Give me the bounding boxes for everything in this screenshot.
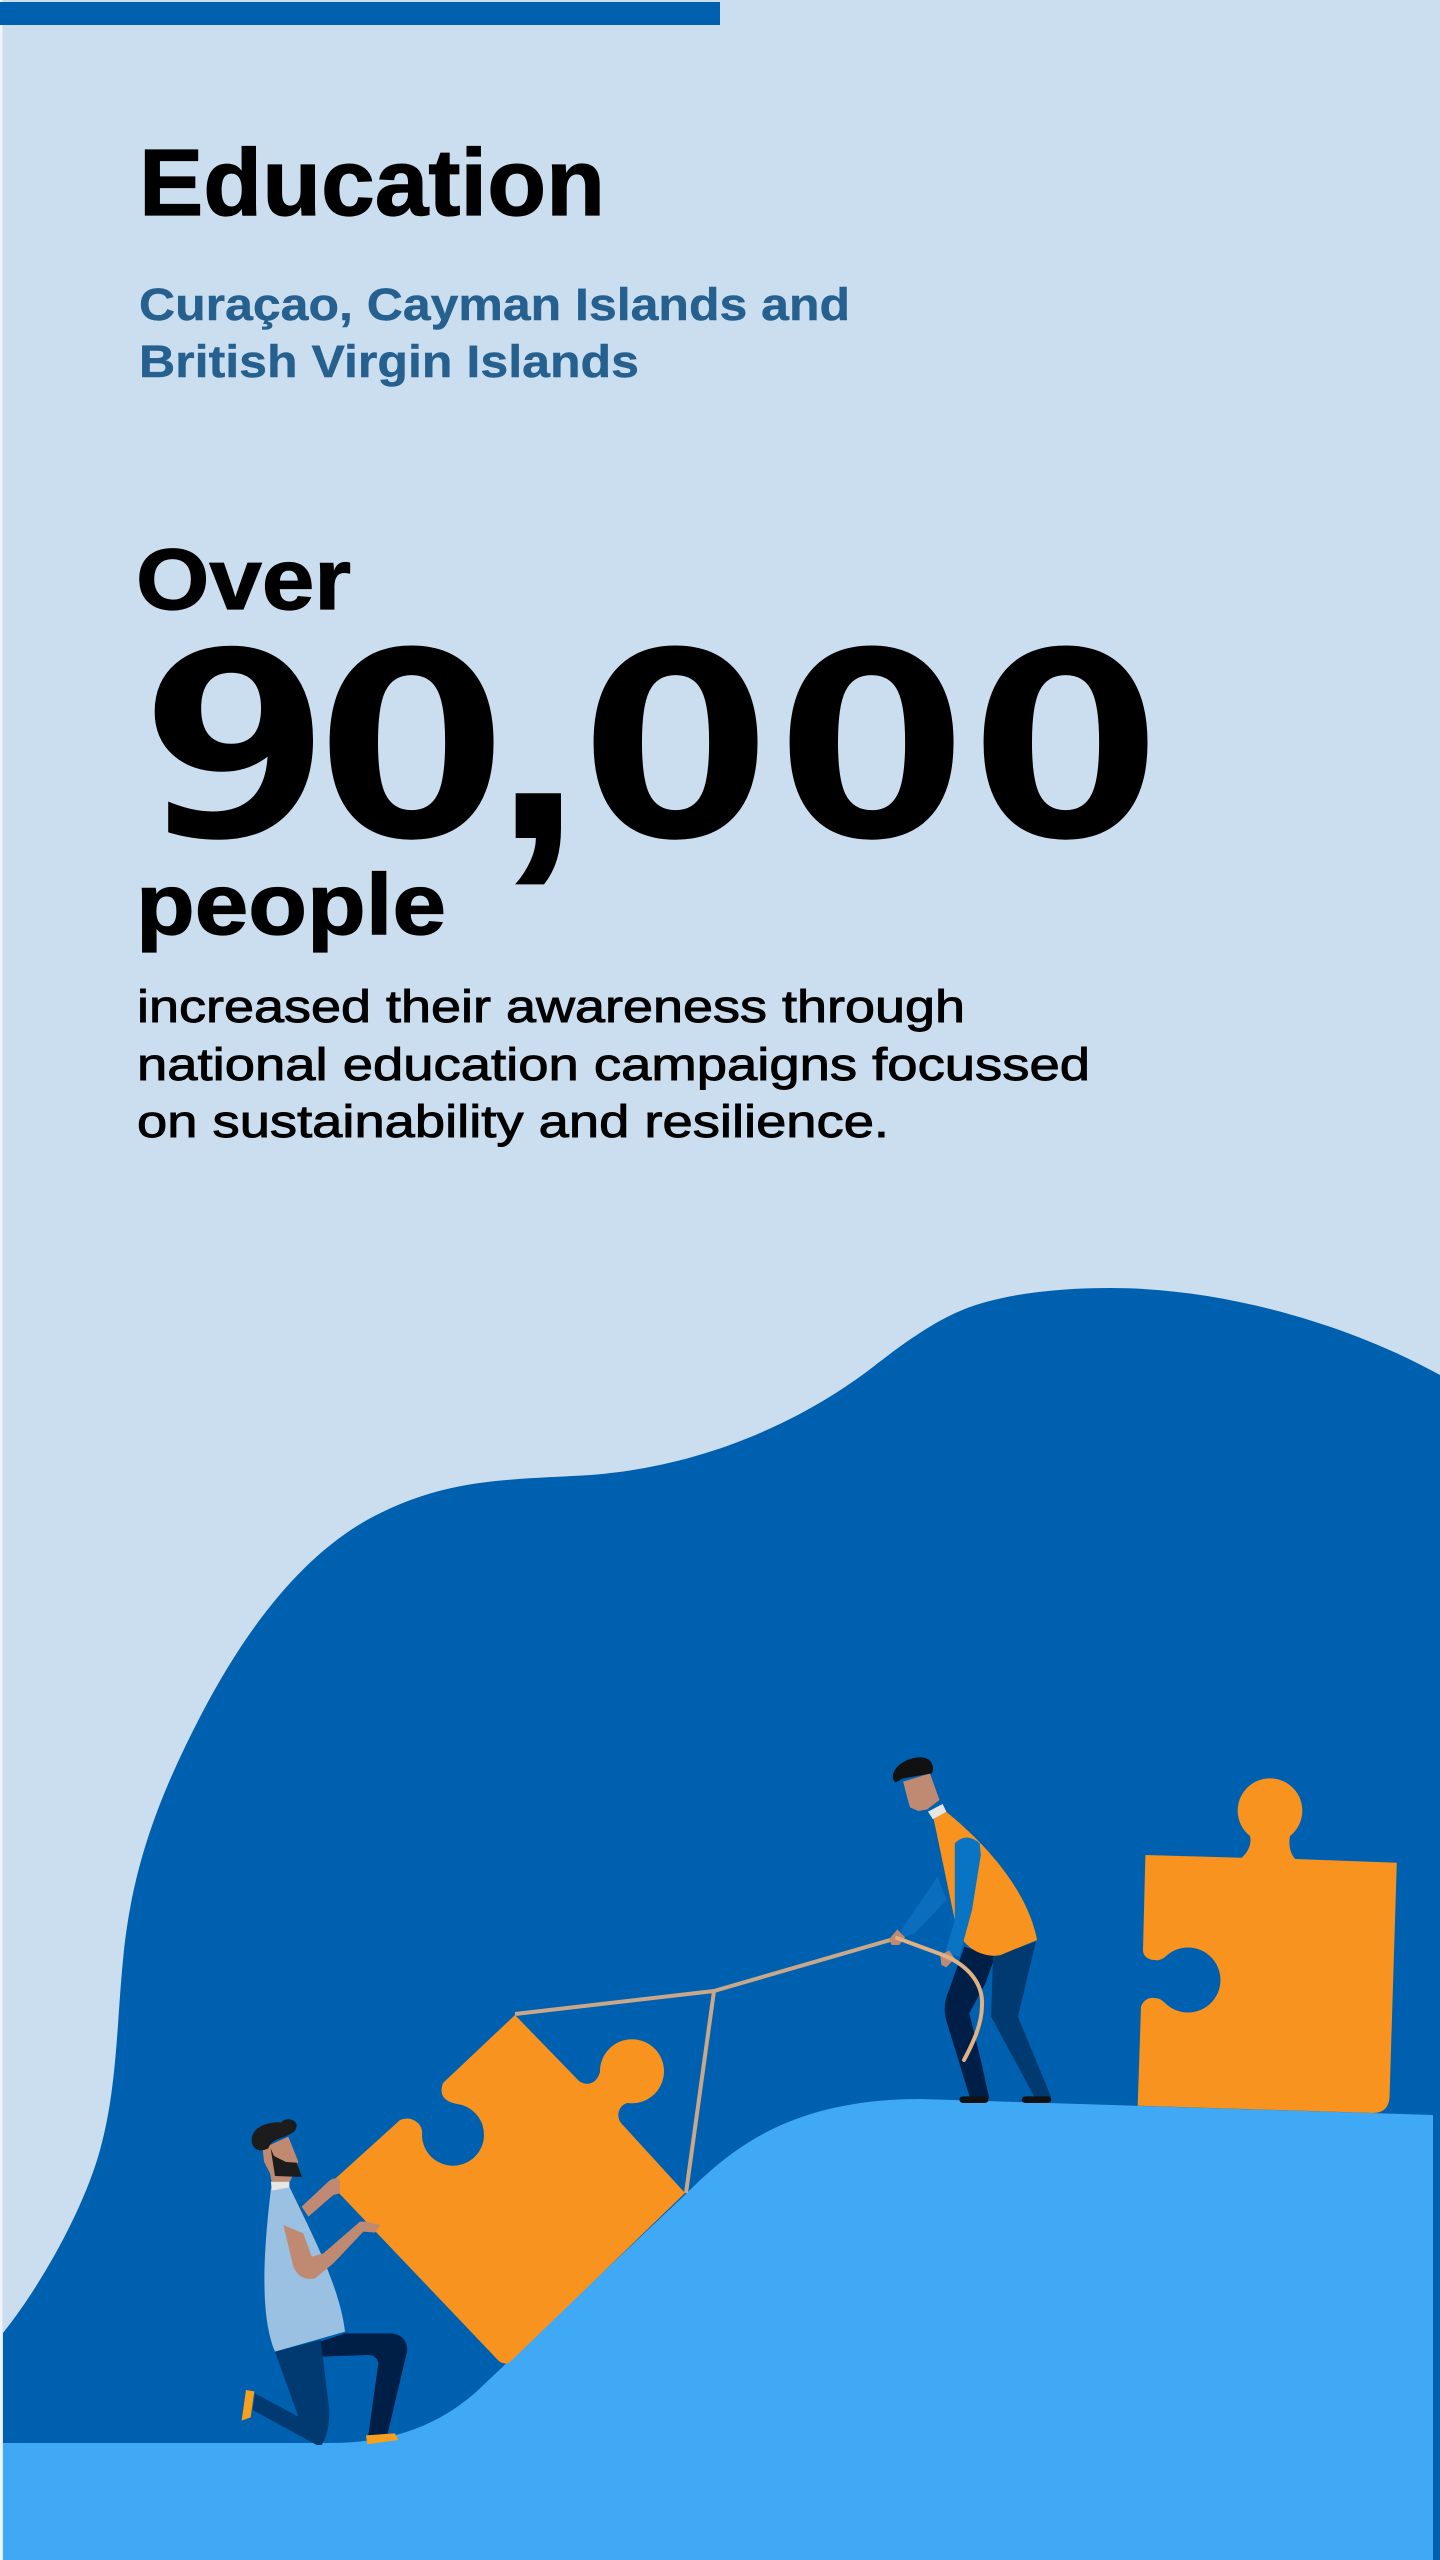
shoes (959, 2096, 988, 2103)
puzzle piece: tilted on slope (333, 2015, 685, 2364)
subtitle: locations: British Virgin Islands (139, 336, 639, 387)
subtitle: locations (139, 279, 850, 387)
face (903, 1773, 939, 1811)
dark blue hill background (3, 1288, 1440, 2560)
hair (252, 2119, 297, 2150)
front arm (283, 2222, 380, 2279)
beard (271, 2148, 302, 2177)
collar (271, 2182, 289, 2191)
rope tied to puzzle piece (515, 1938, 897, 2193)
label: Over: Over (136, 532, 351, 628)
front arm (945, 1837, 981, 1957)
vest (934, 1811, 1037, 1956)
person: kneeling, pushing puzzle piece (242, 2119, 407, 2445)
top accent bar (0, 2, 720, 25)
person: standing, pulling rope (889, 1757, 1051, 2103)
title: Education (139, 130, 605, 236)
shirt (264, 2187, 345, 2352)
back arm (302, 2178, 340, 2217)
hair (893, 1757, 933, 1782)
hands (889, 1929, 955, 1967)
back leg (945, 1947, 995, 2098)
right edge strip (1433, 2115, 1440, 2560)
back arm (901, 1877, 946, 1937)
back leg (320, 2333, 407, 2435)
description text: increased their awareness through (137, 981, 965, 1032)
collar (928, 1804, 946, 1819)
description text: national education campaigns focussed (137, 1039, 1090, 1090)
shoes (242, 2390, 398, 2444)
front leg (991, 1942, 1051, 2098)
description text (137, 981, 1090, 1147)
light blue ground slope (3, 2099, 1433, 2560)
label: people: people (136, 857, 446, 953)
number: 90,000: 90,000 (138, 567, 1163, 902)
big statistic (136, 532, 1163, 953)
puzzle piece: standing (1138, 1778, 1397, 2113)
subtitle: locations: Curaçao, Cayman Islands and (139, 279, 850, 330)
description text: on sustainability and resilience. (137, 1096, 889, 1147)
rope held between hands (897, 1938, 982, 2060)
front leg (253, 2340, 329, 2445)
face (263, 2137, 298, 2182)
